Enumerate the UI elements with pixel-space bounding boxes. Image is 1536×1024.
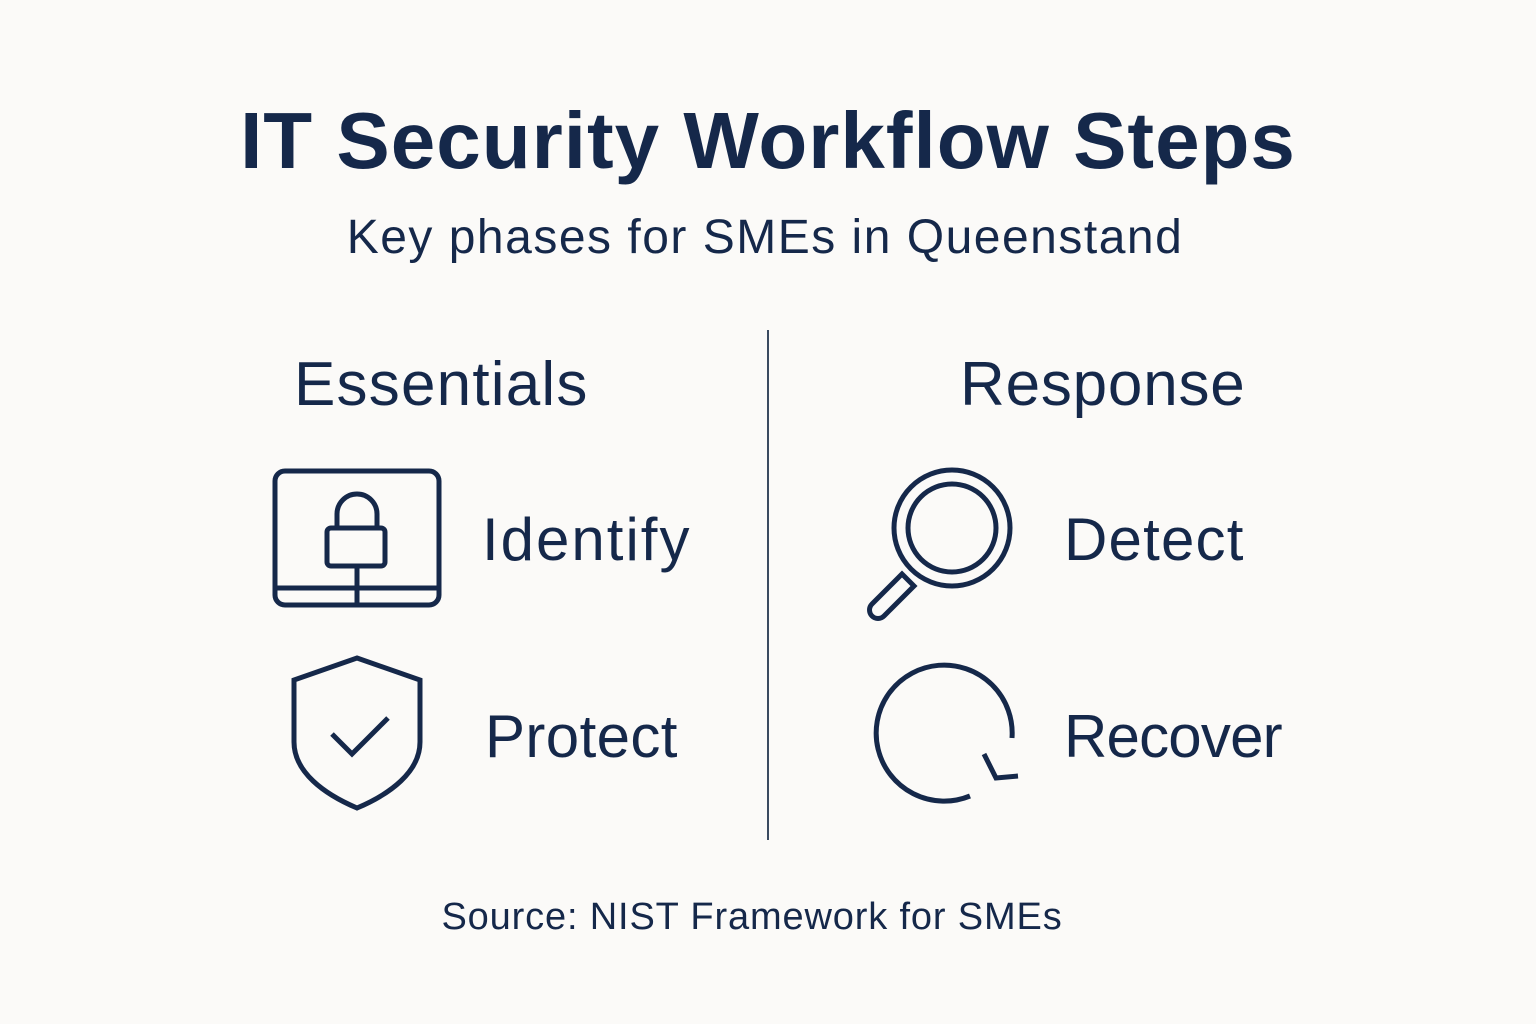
subtitle: Key phases for SMEs in Queenstand <box>347 211 1183 264</box>
title: IT Security Workflow Steps <box>240 96 1296 185</box>
icon: magnifier <box>867 468 1012 621</box>
icon: recover arrow <box>874 662 1018 804</box>
source: Source: NIST Framework for SMEs <box>441 896 1063 938</box>
icon: shield check <box>292 655 422 811</box>
label: Recover: Recover <box>1064 703 1282 770</box>
divider <box>767 330 769 840</box>
icon: laptop lock <box>272 468 442 608</box>
label: Detect: Detect <box>1064 506 1245 573</box>
label: Protect: Protect <box>485 703 678 770</box>
heading: Essentials: Essentials <box>294 350 589 419</box>
label: Identify: Identify <box>482 506 691 573</box>
heading: Response: Response <box>960 350 1246 419</box>
